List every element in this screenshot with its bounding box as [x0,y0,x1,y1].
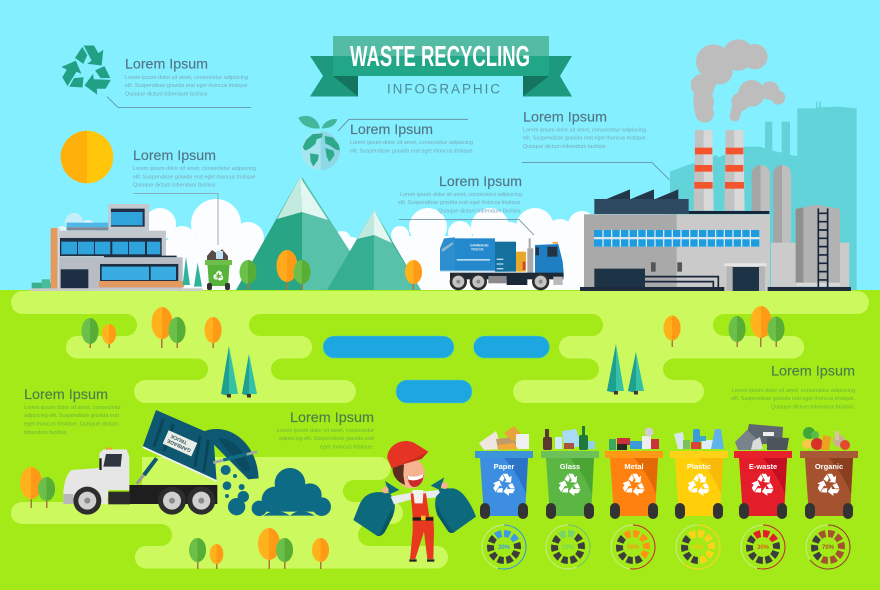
shirt [412,490,423,504]
bin: metal: Metal [624,462,644,471]
garbage truck (blue) [440,237,564,290]
worker with garbage bags [353,441,476,562]
text block: under sun: Lorem Ipsum [133,148,216,163]
gauge: organic 70%: 70% [822,545,835,551]
e-waste contents [735,424,789,450]
text block: center bottom: Lorem Ipsum [290,410,374,425]
cab [63,449,129,504]
text block: truck [398,174,534,235]
bin: paper: Paper [494,462,514,471]
text block: factory: Quisque dictum bibendum facilisis. [523,144,607,150]
text block: globe: Lorem Ipsum [350,122,433,137]
text block: top left [107,56,251,108]
arms [391,492,413,504]
text block: truck: Lorem ipsum dolor sit amet, consectetur adipiscing [400,192,522,198]
organic contents [802,427,850,450]
text block: globe: elit. Suspendisse gravida erat eget rhoncus tristique. [350,148,474,154]
gauge: e-waste 30%: 30% [757,545,770,551]
bin: glass: Glass [560,462,580,471]
trees: left meadow [82,307,222,348]
text block: bottom left: eget rhoncus tristique. Quisque dictum [24,421,118,427]
subtitle: INFOGRAPHIC [387,82,500,96]
icon: globe with leaves [298,116,340,170]
text block: right: Lorem Ipsum [771,364,855,378]
metal contents [609,428,659,450]
gauge: metal 50% [611,525,655,569]
dump truck unloading: TRUCK [169,432,188,445]
sky background [0,0,880,291]
title banner [310,36,572,96]
bin: e-waste: E-waste [749,462,777,471]
text block: center bottom: eget rhoncus tristique. [320,444,374,450]
falling garbage [221,465,331,516]
text block: bottom left: bibendum facilisis. [24,430,68,436]
trees: upper scene [240,250,422,290]
text block: right: Lorem ipsum dolor sit amet, consectetur adipiscing [732,388,855,394]
head [397,458,425,488]
text block: factory: elit. Suspendisse gravida erat eget rhoncus tristique. [523,136,647,142]
trees: lower left and lower path [20,467,329,569]
ground [0,290,880,590]
left bag [385,481,399,494]
bin: plastic: Plastic [687,462,711,471]
factory [580,39,851,291]
text block: under sun [133,148,257,245]
text block: bottom left: Lorem Ipsum [24,387,108,402]
text block: right [731,364,855,410]
gauge: paper 30%: 30% [498,545,511,551]
bin: organic [800,427,858,519]
right bag [431,477,444,490]
text block: truck: Lorem Ipsum [439,174,522,189]
bin: organic: Organic [815,462,843,471]
plastic contents [674,429,724,449]
gauge: plastic 40% [676,525,720,569]
text block: bottom left: Lorem ipsum dolor sit amet, consectetur [24,405,121,411]
trees: right meadow [664,306,784,347]
gauge: glass 20% [546,525,590,569]
glass contents [543,426,595,450]
text block: under sun: Quisque dictum bibendum facilisis. [133,183,217,189]
bin: plastic [670,429,728,519]
mountains [236,177,421,290]
paper contents [479,426,529,450]
white clouds [56,199,596,290]
icon: recycling symbol [58,46,115,97]
gauge: paper 30% [482,525,526,569]
text block: globe [338,119,474,154]
modern building [30,204,203,291]
gauge: glass 20%: 20% [562,545,575,551]
bin: paper [475,426,533,519]
text block: top left: elit. Suspendisse gravida erat eget rhoncus tristique. [125,83,249,89]
text block: truck: Quisque dictum bibendum facilisis. [438,208,522,214]
text block: truck: elit. Suspendisse gravida erat eget rhoncus tristique. [398,200,522,206]
truck label: GARBAGE [470,243,489,247]
text block: factory: Lorem Ipsum [523,110,607,124]
gauge: metal 50%: 50% [627,545,640,551]
text block: bottom left: adipiscing elit. Suspendisse gravida erat [24,413,119,419]
pine trees near building [183,257,202,287]
dump bed [143,410,217,482]
overalls [410,493,434,559]
gauge: e-waste 30% [741,525,785,569]
dump truck label: GARBAGE [166,437,192,453]
text block: bottom left [24,387,121,436]
cap [387,441,428,468]
text block: right: Quisque dictum bibendum facilisis. [771,404,855,410]
background factory silhouette [670,102,857,290]
pine trees: meadow [221,344,644,398]
text block: center bottom [277,410,374,450]
chassis [129,485,217,504]
text block: factory: Lorem ipsum dolor sit amet, consectetur adipiscing [523,127,646,133]
text block: under sun: elit. Suspendisse gravida erat eget rhoncus tristique. [133,174,257,180]
garbage truck (blue): TRUCK [471,247,484,251]
text block: under sun: Lorem ipsum dolor sit amet, consectetur adipiscing [133,166,256,172]
text block: right: elit. Suspendisse gravida erat eget rhoncus tristique. [731,396,855,402]
bin: metal [605,428,663,519]
text block: center bottom: adipiscing elit. Suspendisse gravida erat [279,436,374,442]
text block: top left: Lorem ipsum dolor sit amet, consectetur adipiscing [125,75,248,81]
dump truck unloading [63,410,331,516]
text block: center bottom: Lorem ipsum dolor sit amet, consectetur [277,428,374,434]
gauge: organic 70% [806,525,850,569]
winding paths [11,291,869,568]
text block: top left: Quisque dictum bibendum facilisis. [125,91,209,97]
icon: sun [61,131,113,183]
lakes [323,336,550,403]
icon: small green bin [205,249,232,290]
title text: WASTE RECYCLING [350,41,530,73]
gauge: plastic 40%: 40% [692,545,705,551]
bin: e-waste [734,424,792,519]
bin: glass [541,426,599,519]
text block: top left: Lorem Ipsum [125,56,208,72]
text block: globe: Lorem ipsum dolor sit amet, consectetur adipiscing [350,140,473,146]
smoke [691,39,785,121]
text block: factory [522,110,670,180]
